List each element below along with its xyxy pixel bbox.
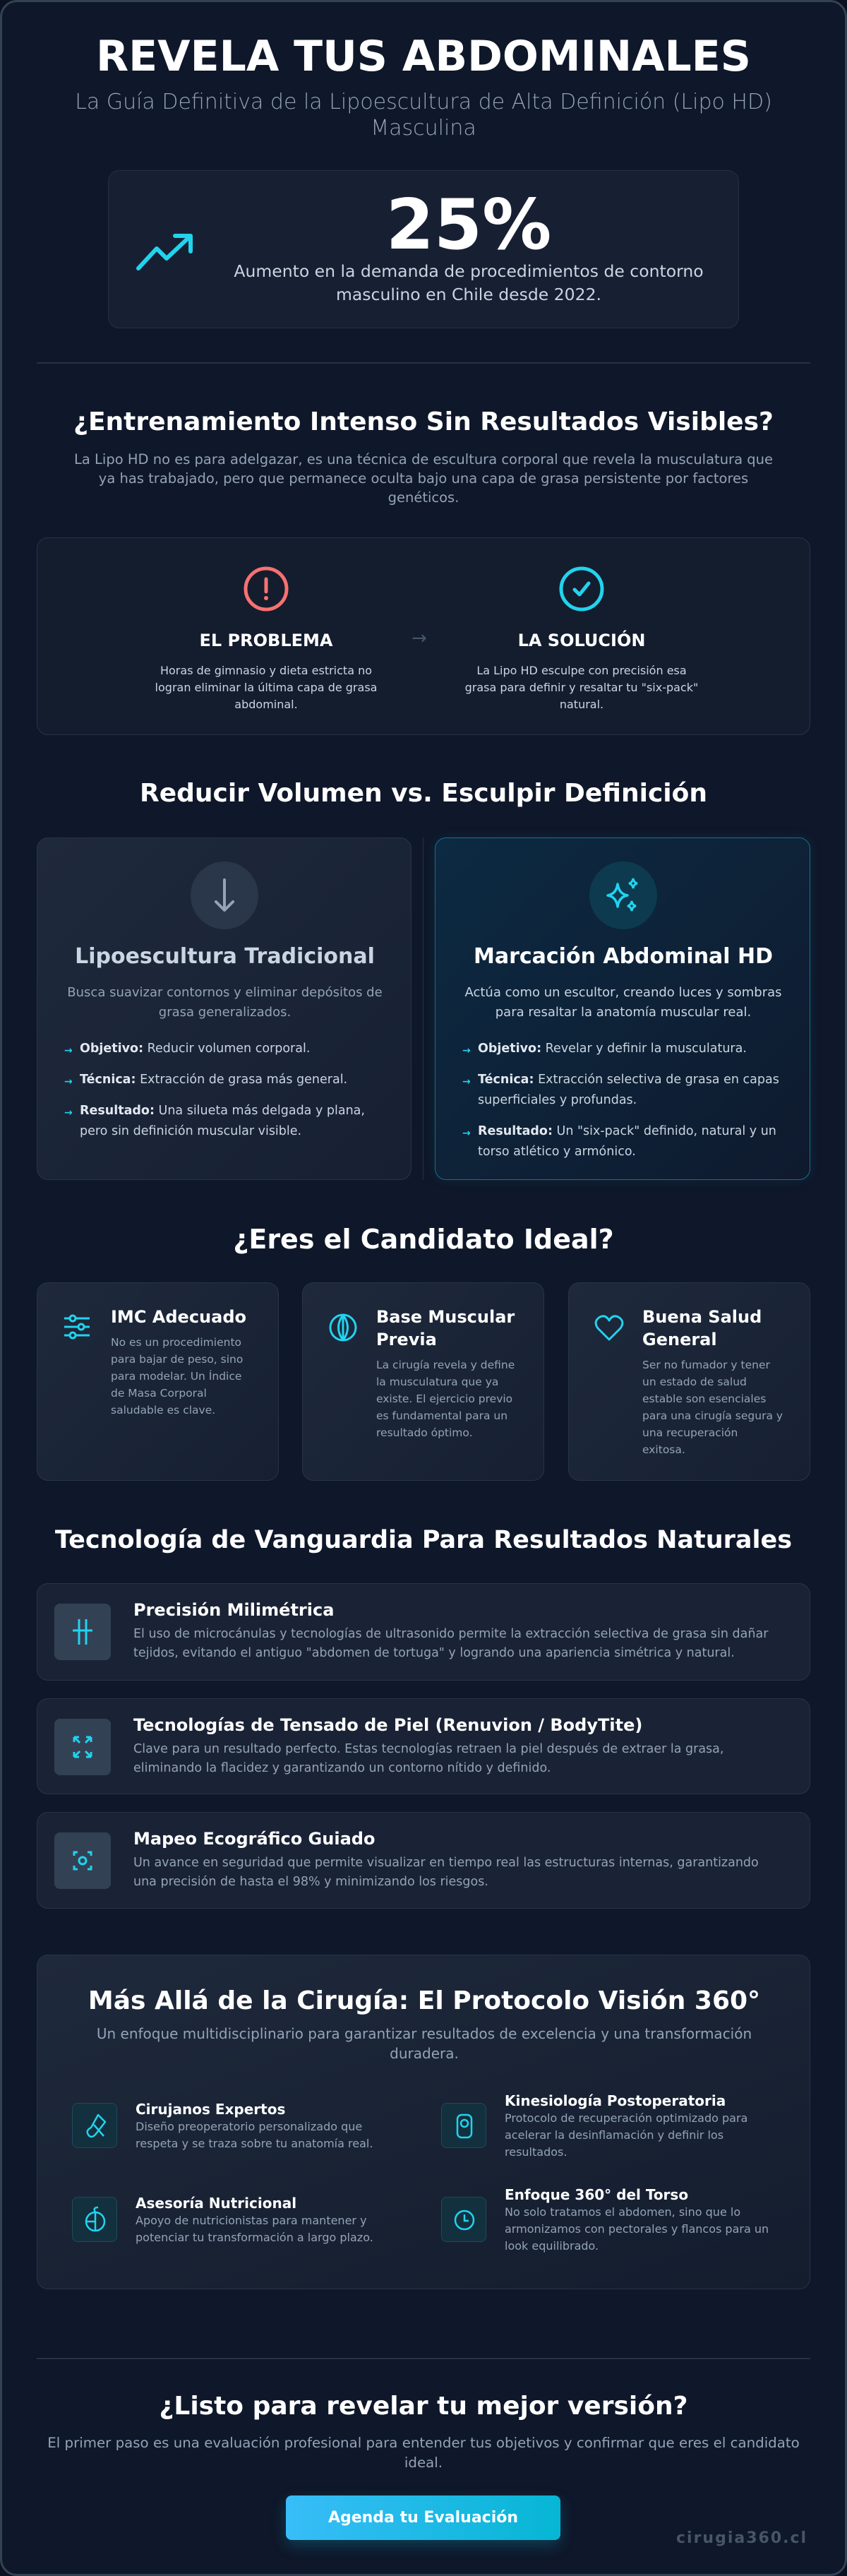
icon: heart: [594, 1315, 624, 1341]
icon: alert: [244, 566, 288, 612]
panel: protocolo 360: Kinesiología Postoperatoria: [505, 2092, 726, 2109]
item: kinesiologia: [441, 2092, 747, 2159]
tech card 1: [37, 1583, 810, 1681]
stat panel: [108, 170, 739, 328]
icon: sliders: [64, 1315, 90, 1339]
panel: protocolo 360: [37, 1955, 810, 2289]
card: salud: Ser no fumador y tener: [642, 1359, 770, 1371]
tech card 3: Un avance en seguridad que permite visualizar en tiempo real las estructuras internas, garantizando una precisión de hasta el 98% y minimizando los riesgos.: [133, 1856, 759, 1889]
solution column: natural.: [560, 698, 603, 711]
panel: problem/solution: [37, 537, 810, 735]
card: salud: [568, 1282, 810, 1481]
heading: comparison: Reducir Volumen vs. Esculpir Definición: [140, 779, 707, 808]
item: cirujanos: Cirujanos Expertos: [136, 2101, 285, 2118]
card: salud: exitosa.: [642, 1443, 685, 1456]
card: salud: Buena Salud: [642, 1307, 762, 1327]
footer brand: cirugia360.cl: [676, 2529, 807, 2547]
stat caption: Aumento en la demanda de procedimientos de contorno masculino en Chile desde 2022.: [234, 261, 704, 304]
icon: check: [559, 566, 604, 612]
panel: HD: Actúa como un escultor, creando luces y sombras para resaltar la anatomía muscular real.: [464, 985, 782, 1020]
tech card 2: [37, 1698, 810, 1794]
tech card 3: Mapeo Ecográfico Guiado: [133, 1829, 375, 1849]
icon: scan: [54, 1832, 111, 1889]
icon: muscle globe: [329, 1313, 357, 1342]
card: IMC: No es un procedimiento para bajar de peso, sino para modelar. Un Índice de Masa Corporal saludable es clave.: [111, 1336, 243, 1417]
icon: sparkles: [589, 861, 657, 929]
card: salud: General: [642, 1330, 717, 1349]
stat number: 25%: [386, 185, 551, 266]
solution column: grasa para definir y resaltar tu "six-pack": [465, 681, 698, 694]
card: salud: para una cirugía segura y: [642, 1409, 783, 1422]
item: kinesiologia: Protocolo de recuperación optimizado para acelerar la desinflamación y definir los resultados.: [505, 2111, 747, 2159]
heading: tecnologia: Tecnología de Vanguardia Para Resultados Naturales: [55, 1526, 792, 1554]
button: [286, 2496, 560, 2540]
problem column: logran eliminar la última capa de grasa: [155, 681, 377, 694]
solution column: LA SOLUCIÓN: [518, 631, 645, 650]
panel: traditional: [37, 837, 412, 1180]
icon: trending arrow: [136, 234, 193, 270]
item: cirujanos: [72, 2101, 373, 2150]
heading: CTA: ¿Listo para revelar tu mejor versión?: [160, 2392, 687, 2421]
tech card 2: Clave para un resultado perfecto. Estas tecnologías retraen la piel después de extraer la grasa, eliminando la flacidez y garantizando un contorno nítido y definido.: [133, 1742, 723, 1775]
card: IMC: [37, 1282, 279, 1481]
intro paragraph: La Lipo HD no es para adelgazar, es una técnica de escultura corporal que revela la musculatura que ya has trabajado, pero que permanece oculta bajo una capa de grasa persistente por factores genéticos.: [74, 451, 773, 506]
tech card 1: Precisión Milimétrica: [133, 1600, 334, 1620]
problem column: [155, 566, 377, 711]
card: IMC: IMC Adecuado: [111, 1307, 246, 1327]
solution column: [465, 566, 698, 711]
item: nutricion: Apoyo de nutricionistas para mantener y potenciar tu transformación a largo plazo.: [136, 2214, 373, 2244]
panel: traditional: Objetivo: Reducir volumen corporal.: [80, 1042, 310, 1056]
icon: precision: [54, 1604, 111, 1660]
card: salud: un estado de salud: [642, 1376, 747, 1388]
icon: down arrow: [191, 861, 258, 929]
problem column: EL PROBLEMA: [200, 631, 332, 650]
panel: HD: Marcación Abdominal HD: [474, 944, 773, 969]
item: enfoque 360: [441, 2186, 769, 2253]
panel: traditional: Técnica: Extracción de grasa más general.: [80, 1073, 347, 1087]
solution column: La Lipo HD esculpe con precisión esa: [476, 664, 687, 677]
problem column: Horas de gimnasio y dieta estricta no: [160, 664, 372, 677]
arrow: →: [412, 628, 427, 649]
tech card 1: El uso de microcánulas y tecnologías de ultrasonido permite la extracción selectiva de grasa sin dañar tejidos, evitando el antiguo "abdomen de tortuga" y logrando una apariencia simétrica y natural.: [133, 1627, 768, 1660]
heading: candidato: ¿Eres el Candidato Ideal?: [233, 1224, 614, 1255]
title: REVELA TUS ABDOMINALES: [96, 32, 751, 81]
panel: HD: Resultado: Un "six-pack" definido, natural y un torso atlético y armónico.: [478, 1124, 776, 1159]
icon: expand: [54, 1719, 111, 1775]
card: base muscular: [302, 1282, 544, 1481]
item: nutricion: Asesoría Nutricional: [136, 2195, 296, 2212]
CTA paragraph: El primer paso es una evaluación profesional para entender tus objetivos y confirmar que eres el candidato ideal.: [47, 2435, 800, 2471]
card: base muscular: Base Muscular Previa: [376, 1307, 515, 1349]
panel: protocolo 360: Enfoque 360° del Torso: [505, 2186, 688, 2203]
card: base muscular: La cirugía revela y define la musculatura que ya existe. El ejercicio previo es fundamental para un resultado óptimo.: [376, 1359, 515, 1439]
panel: HD: [435, 837, 810, 1180]
panel: traditional: Resultado: Una silueta más delgada y plana, pero sin definición muscular visible.: [80, 1104, 365, 1138]
panel: protocolo 360: Más Allá de la Cirugía: El Protocolo Visión 360°: [88, 1986, 760, 2015]
item: enfoque 360: No solo tratamos el abdomen, sino que lo armonizamos con pectorales y flancos para un look equilibrado.: [505, 2205, 769, 2253]
card: salud: una recuperación: [642, 1426, 738, 1439]
tech card 3: [37, 1812, 810, 1909]
panel: HD: Técnica: Extracción selectiva de grasa en capas superficiales y profundas.: [478, 1073, 779, 1107]
item: nutricion: [72, 2195, 373, 2244]
problem column: abdominal.: [234, 698, 298, 711]
subtitle: La Guía Definitiva de la Lipoescultura de Alta Definición (Lipo HD) Masculina: [75, 90, 772, 141]
panel: traditional: Busca suavizar contornos y eliminar depósitos de grasa generalizados.: [67, 985, 383, 1020]
card: salud: estable son esenciales: [642, 1393, 766, 1405]
heading: entrenamiento: ¿Entrenamiento Intenso Sin Resultados Visibles?: [73, 407, 774, 436]
panel: protocolo 360: Un enfoque multidisciplinario para garantizar resultados de excelencia y una transformación duradera.: [97, 2025, 752, 2062]
button: Agenda tu Evaluación: [328, 2509, 518, 2527]
panel: HD: Objetivo: Revelar y definir la musculatura.: [478, 1042, 747, 1056]
item: cirujanos: Diseño preoperatorio personalizado que respeta y se traza sobre tu anatomía real.: [136, 2120, 373, 2150]
tech card 2: Tecnologías de Tensado de Piel (Renuvion / BodyTite): [133, 1715, 642, 1735]
panel: traditional: Lipoescultura Tradicional: [75, 944, 375, 969]
